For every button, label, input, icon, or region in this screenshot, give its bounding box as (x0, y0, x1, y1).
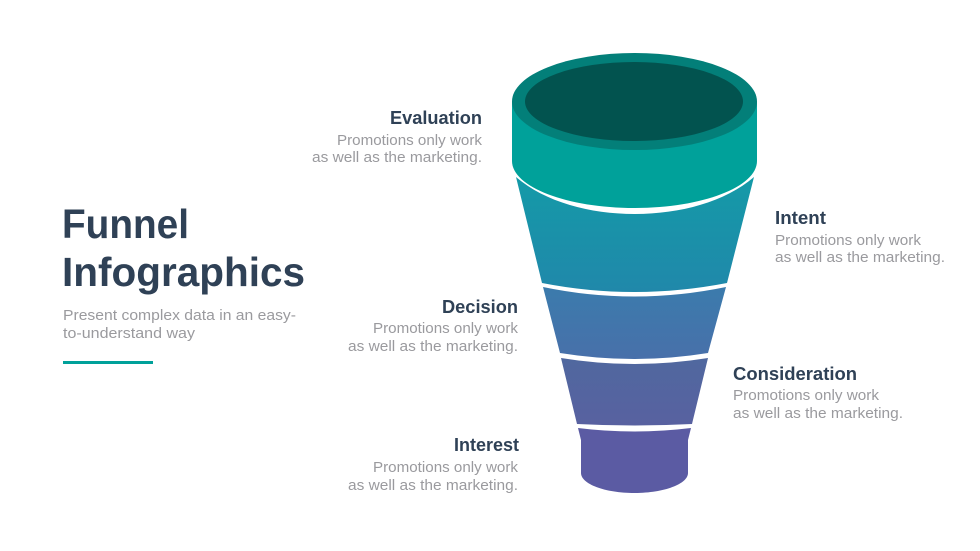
subtitle: Present complex data in an easy- (63, 308, 296, 324)
funnel chart (512, 53, 757, 493)
label: consideration (733, 364, 903, 422)
title: Infographics (62, 249, 305, 295)
label: intent: Intent (775, 208, 826, 228)
label: interest: Interest (454, 435, 519, 455)
label: consideration: as well as the marketing. (733, 406, 903, 422)
label: interest: as well as the marketing. (348, 478, 518, 494)
funnel top rim (512, 53, 757, 150)
title: Funnel (62, 201, 189, 247)
label: evaluation: Evaluation (390, 108, 482, 128)
label: intent: Promotions only work (775, 233, 922, 249)
label: evaluation: Promotions only work (337, 133, 483, 149)
label: intent (775, 208, 945, 266)
label: interest: Promotions only work (373, 460, 519, 476)
funnel section: intent (516, 177, 754, 292)
label: interest (348, 435, 519, 494)
funnel opening (525, 62, 743, 141)
label: decision: Promotions only work (373, 321, 519, 337)
label: evaluation (312, 108, 483, 166)
label: intent: as well as the marketing. (775, 250, 945, 266)
label: evaluation: as well as the marketing. (312, 150, 482, 166)
label: decision: Decision (442, 297, 518, 317)
label: consideration: Consideration (733, 364, 857, 384)
funnel section: decision (543, 287, 726, 359)
title (62, 201, 305, 295)
subtitle: to-understand way (63, 326, 196, 342)
label: consideration: Promotions only work (733, 388, 880, 404)
funnel section: interest (578, 428, 691, 493)
label: decision (348, 297, 519, 355)
funnel section: consideration (561, 358, 708, 426)
accent underline (63, 361, 153, 364)
label: decision: as well as the marketing. (348, 339, 518, 355)
funnel section: evaluation rim and body (512, 102, 757, 208)
subtitle (63, 308, 296, 342)
